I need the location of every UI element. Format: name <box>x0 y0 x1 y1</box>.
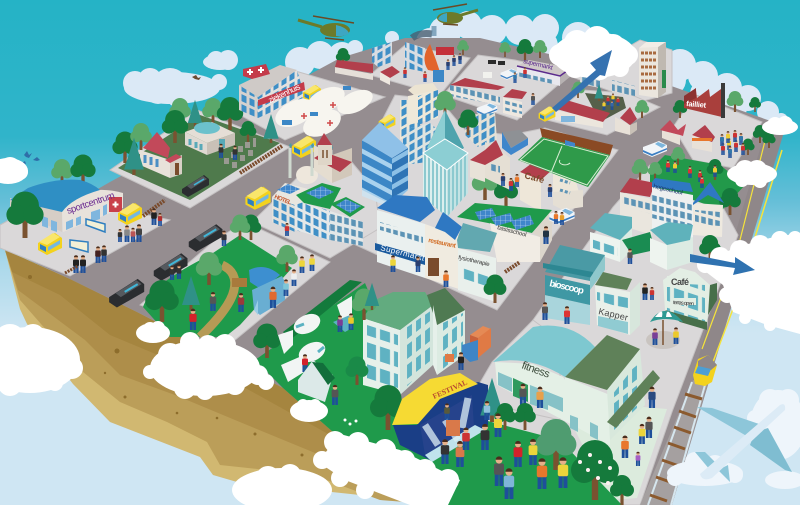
building: blue stepped tower <box>362 122 408 208</box>
building: basisschool with solar panels <box>457 203 575 262</box>
cafe terrace umbrella <box>646 311 683 349</box>
campsite: caravans and tents <box>253 280 406 430</box>
ambulances on hospital road <box>245 114 395 210</box>
building: hogeschool row: hogeschool <box>653 183 684 197</box>
railway tracks and train <box>640 355 717 505</box>
building: supermarkt with cows and houses: supermarkt <box>523 58 554 72</box>
arrow: pointing right <box>690 254 755 275</box>
pale clouds behind the island <box>123 11 788 127</box>
building: hogeschool row <box>620 178 724 238</box>
building: white and teal skyscraper <box>423 110 468 217</box>
building: bioscoop <box>542 245 605 325</box>
building: mausoleum <box>185 122 235 155</box>
festival stage <box>392 373 504 462</box>
arrow: rising <box>552 50 612 112</box>
building: Supermarkt and restaurant: restaurant <box>428 237 457 250</box>
building: mosque and chapel <box>289 133 352 184</box>
building: basisschool with solar panels: basisschool <box>496 225 527 239</box>
building: hotel and solar offices <box>272 183 365 246</box>
building: Supermarkt and restaurant: fysiotherapie <box>458 255 491 268</box>
building: Kapper: Kapper <box>598 306 629 323</box>
building: failliet factory: failliet <box>686 99 707 110</box>
island soil layers <box>5 250 445 505</box>
building: Café terras: terras open <box>673 300 694 307</box>
building: church <box>124 132 182 178</box>
park lawn with footpath <box>143 235 292 337</box>
building: fitness: fitness <box>520 360 552 381</box>
building: Café and townhouses <box>470 140 584 212</box>
airplane <box>695 404 792 482</box>
helicopter: right <box>433 4 478 25</box>
building: Supermarkt and restaurant <box>375 195 520 303</box>
cemetery lawn <box>118 115 280 200</box>
building: failliet factory <box>673 83 761 118</box>
emergency tents <box>271 82 376 142</box>
building: tan offices <box>400 83 528 165</box>
park details: trees, pond, kiosk and people <box>145 214 396 330</box>
festival crowd and blossom trees <box>441 401 634 505</box>
building: bioscoop: bioscoop <box>548 278 585 297</box>
building: Supermarkt and restaurant: Supermarkt <box>380 243 426 263</box>
birds <box>22 75 666 164</box>
festival stage: FESTIVAL <box>431 378 469 401</box>
ambulances and people at sportcentrum <box>38 200 165 273</box>
football stadium <box>518 128 613 187</box>
hearse on lawn <box>182 175 209 197</box>
building: sportcentrum: sportcentrum <box>65 190 116 217</box>
railway edge road <box>693 132 783 385</box>
building: Café terras <box>642 268 717 330</box>
building: sportcentrum <box>6 180 123 238</box>
hill lawn with protesters behind hogeschool <box>632 147 745 215</box>
building: Café and townhouses: Café <box>523 170 545 185</box>
building: supermarkt with cows and houses <box>450 39 571 118</box>
building: red roofed barn with crowd <box>539 82 649 135</box>
building: hotel and solar offices: HOTEL <box>273 194 292 207</box>
building: Café terras: Café <box>671 277 689 287</box>
building: apartment tower and flats <box>580 42 666 98</box>
graves and fence <box>219 114 282 173</box>
building: green roofed apartments <box>363 288 465 395</box>
building: Kapper <box>595 272 640 335</box>
delivery truck <box>445 326 491 370</box>
lower lawn <box>255 283 622 505</box>
lower right sky clouds <box>667 389 800 489</box>
building: ziekenhuis hospital <box>239 64 305 118</box>
building: teal roofed houses <box>590 213 721 270</box>
houses and protest crowd <box>643 120 776 158</box>
hearses on road <box>109 224 227 308</box>
trees behind church <box>51 97 243 186</box>
helicopter: left <box>298 16 354 40</box>
building: fire scene and top-row buildings <box>335 26 462 85</box>
building: ziekenhuis hospital: ziekenhuis <box>267 82 302 105</box>
building: fitness <box>493 326 660 466</box>
